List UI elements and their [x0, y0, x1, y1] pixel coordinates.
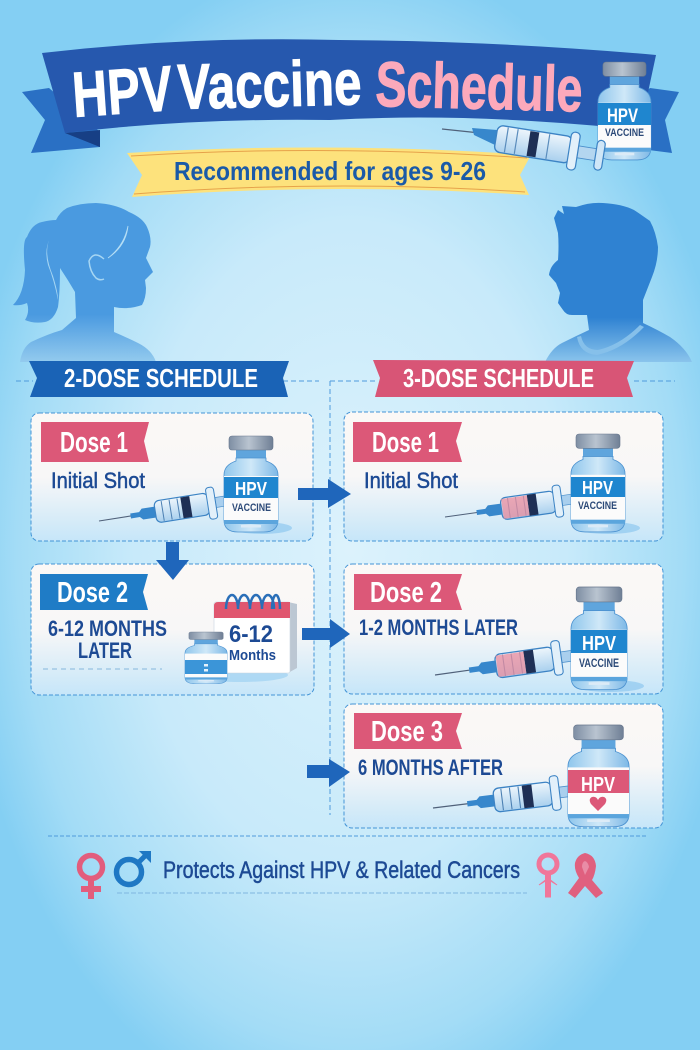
header syringe	[442, 120, 606, 175]
panel: 3-dose, dose 1	[344, 412, 663, 541]
vial: HPV	[235, 479, 267, 499]
arrow: dose 1 to 3-dose dose 1	[298, 479, 351, 508]
arrow: down from dose 1 to dose 2	[156, 542, 189, 580]
silhouette: girl	[13, 203, 156, 362]
connector dashes	[16, 381, 675, 815]
calendar icon: 6-12	[229, 621, 273, 648]
dose 2 tag: Dose 2	[370, 577, 442, 609]
vial	[568, 725, 629, 827]
header vial	[598, 62, 651, 160]
heart	[590, 797, 606, 811]
interval text: 6 MONTHS AFTER	[358, 755, 503, 780]
banner left tail	[22, 88, 100, 153]
title banner	[22, 39, 679, 153]
arrow: dose 2 to 3-dose dose 2	[302, 619, 350, 648]
silhouette: boy	[545, 203, 692, 362]
vial: HPV	[581, 774, 616, 796]
panel: 3-dose, dose 2	[344, 564, 663, 694]
dose 1 tag: Dose 1	[60, 427, 128, 459]
calendar icon	[214, 595, 297, 673]
banner right tail	[625, 88, 679, 153]
ribbon: 3-dose schedule	[373, 360, 634, 397]
panel: 2-dose, dose 2	[31, 564, 314, 695]
interval text: 6-12 MONTHS	[48, 616, 167, 641]
arrow: to dose 3	[307, 759, 350, 787]
dose 3 tag: Dose 3	[371, 716, 443, 748]
2-dose label: 2-DOSE SCHEDULE	[64, 363, 258, 393]
small vial	[185, 632, 227, 684]
initial shot text: Initial Shot	[51, 468, 145, 493]
syringe	[431, 771, 594, 825]
title text Schedule: Schedule	[375, 48, 583, 125]
dose 1 tag	[41, 422, 149, 462]
header vial VACCINE: VACCINE	[605, 127, 644, 139]
subtitle text: Recommended for ages 9-26	[174, 156, 486, 186]
footer text: Protects Against HPV & Related Cancers	[163, 857, 520, 884]
icon: female symbol	[80, 856, 102, 899]
panel: 2-dose, dose 1	[31, 413, 313, 541]
vial: HPV	[582, 633, 617, 655]
title text HPV Vaccine: Vaccine	[176, 46, 362, 123]
initial shot text: Initial Shot	[364, 468, 458, 493]
interval text: 1-2 MONTHS LATER	[359, 615, 518, 640]
syringe	[443, 481, 594, 533]
3-dose label: 3-DOSE SCHEDULE	[403, 363, 594, 393]
header vial HPV: HPV	[607, 106, 638, 127]
dose 1 tag: Dose 1	[372, 427, 439, 459]
vial: VACCINE	[578, 500, 617, 512]
calendar icon: Months	[229, 647, 276, 664]
interval text: LATER	[78, 638, 132, 663]
icon: male symbol	[116, 851, 151, 884]
title text HPV Vaccine: HPV	[70, 52, 175, 131]
panel: 3-dose, dose 3	[344, 704, 663, 828]
syringe	[96, 482, 248, 537]
vial	[571, 434, 640, 534]
footer divider	[48, 835, 647, 837]
subtitle ribbon	[127, 147, 531, 197]
dose 2 tag: Dose 2	[57, 577, 128, 609]
dose 1 tag	[353, 422, 462, 462]
interval text	[48, 616, 167, 663]
banner main	[42, 39, 656, 133]
syringe	[433, 636, 596, 692]
vial: VACCINE	[232, 502, 271, 514]
title text HPV Vaccine	[70, 46, 362, 131]
vial: HPV	[582, 478, 613, 498]
vial	[224, 436, 292, 534]
ribbon: 2-dose schedule	[29, 361, 289, 397]
icon: awareness ribbon	[568, 853, 603, 898]
vial: VACCINE	[579, 656, 619, 670]
icon: female symbol small	[539, 855, 557, 897]
vial	[571, 587, 644, 692]
